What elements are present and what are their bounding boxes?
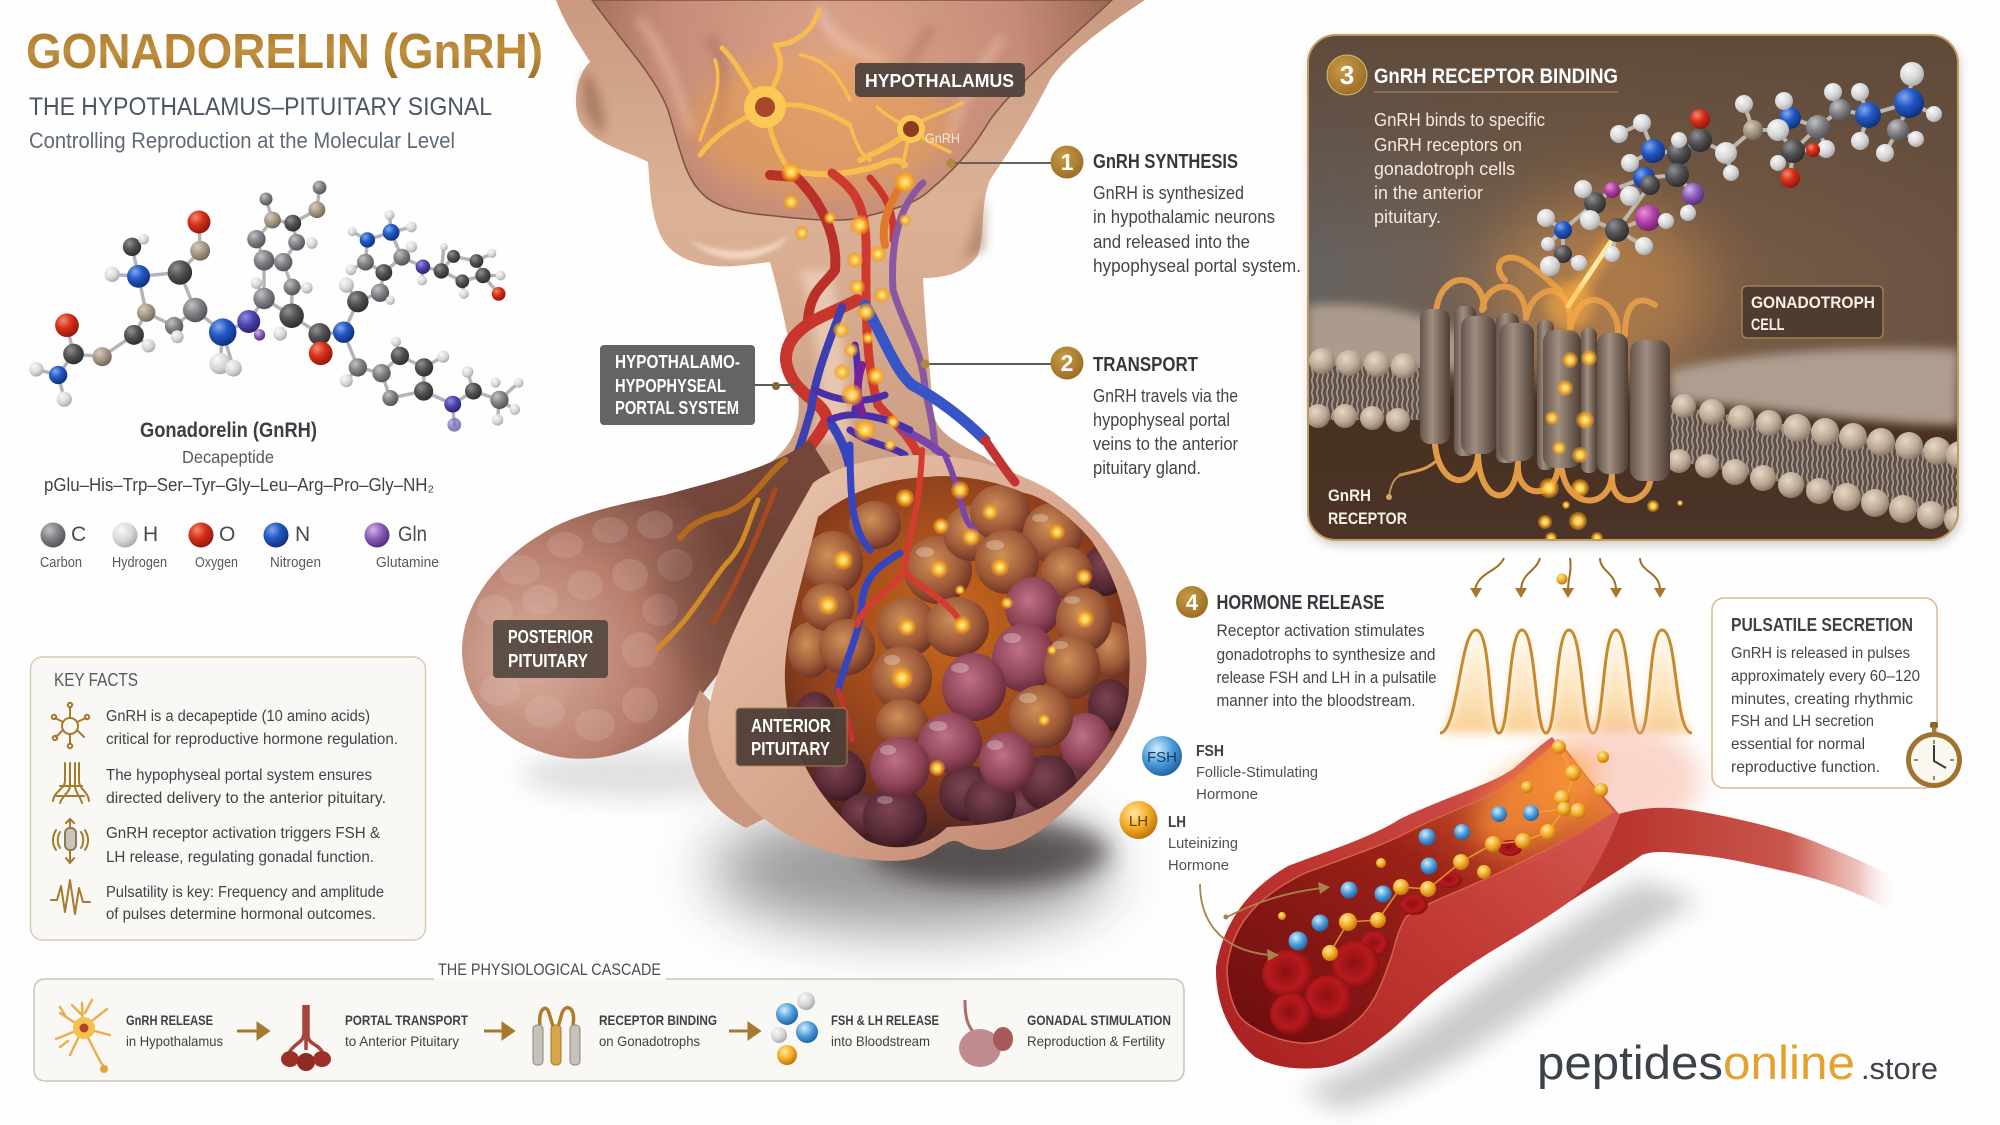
step 3 text: GnRH binds to specific [1374,110,1545,130]
signal beam [1546,240,1612,329]
logo [1537,1036,1938,1089]
arrow [729,1024,759,1038]
back wall of anterior lobe [688,690,800,828]
callout 2: transport: 2 [1061,350,1073,376]
step 3 text [1374,110,1545,227]
warm glow [1490,200,1710,380]
step text: portal transport [345,1012,468,1049]
cascade heading: THE PHYSIOLOGICAL CASCADE [438,960,661,979]
atom legend: Carbon [40,555,82,571]
outer vessel wall [1216,737,1620,1068]
step 3 heading: GnRH RECEPTOR BINDING [1374,65,1618,88]
molecule name: Gonadorelin (GnRH) [140,419,317,442]
label: gonadotroph cell: CELL [1751,315,1784,334]
posterior pituitary lobe [462,440,835,759]
step 3 number: 3 [1340,60,1354,90]
receptor helices [1420,306,1670,481]
hormone links [1330,747,1578,953]
label: GnRH receptor: RECEPTOR [1328,509,1407,528]
vessels on anterior lobe [838,440,1015,740]
fact 4: of pulses determine hormonal outcomes. [106,906,376,923]
step text: FSH and LH release: into Bloodstream [831,1033,930,1049]
atom legend: Oxygen [195,555,238,571]
step text: gonadal stimulation [1027,1012,1171,1049]
step 4: hormone release [1176,586,1436,710]
fact 4: Pulsatility is key: Frequency and amplitude [106,884,384,901]
panel: receptor binding [1306,35,1974,545]
callout 2: transport: GnRH travels via the [1093,386,1238,406]
label: portal system [600,345,796,425]
fact 2 [106,767,386,807]
glowing granules [818,481,1094,776]
panel: pulsatile secretion: PULSATILE SECRETION [1731,614,1913,635]
logo: peptides [1537,1036,1723,1089]
step 4: hormone release: HORMONE RELEASE [1216,592,1384,614]
step text: receptor binding [599,1012,717,1049]
panel: physiological cascade [34,960,1184,1081]
callout 1: synthesis: hypophyseal portal system. [1093,256,1301,276]
posterior lobe dark side [658,500,790,700]
title: GONADORELIN (GnRH) [26,25,543,79]
icon: molecule [52,703,89,748]
legend: FSH [1142,736,1318,803]
panel: pulsatile secretion: GnRH is released in pulses [1731,645,1910,662]
fact 2: directed delivery to the anterior pituitary. [106,790,386,807]
legend: LH: Luteinizing [1168,835,1238,852]
label: GnRH receptor [1328,472,1412,528]
step 4: hormone release: gonadotrophs to synthesize and [1216,646,1436,664]
legend: LH: LH [1129,813,1148,830]
legend: LH [1120,801,1238,874]
hormone granules in the stalk [781,162,916,451]
panel: key facts [30,657,426,940]
arrow [484,1024,513,1038]
callout 2: transport: veins to the anterior [1093,434,1238,454]
label: posterior pituitary [493,620,608,678]
fact 2: The hypophyseal portal system ensures [106,767,372,784]
step 3 text: gonadotroph cells [1374,159,1515,179]
atom legend: Glutamine [376,555,439,571]
legend: FSH: Hormone [1196,786,1258,803]
back wall glow [1540,725,1700,835]
callout 1: synthesis: 1 [1061,149,1074,175]
step 3 text: pituitary. [1374,207,1441,227]
fact 1 [106,708,398,748]
label: anterior pituitary: PITUITARY [751,739,830,759]
posterior lobe texture [477,511,693,741]
icon: hormone spheres [771,992,818,1065]
step 3 text: GnRH receptors on [1374,135,1522,155]
step 3 number [1327,55,1367,95]
step text: GnRH release: GnRH RELEASE [126,1012,213,1028]
tagline: Controlling Reproduction at the Molecular Level [29,128,455,153]
step text: FSH and LH release [831,1012,939,1049]
molecule: gonadorelin ball and stick [29,181,524,432]
tissue highlights [640,10,1000,135]
panel: pulsatile secretion: reproductive function. [1731,759,1880,776]
atom legend: H [143,523,158,546]
fact 3: GnRH receptor activation triggers FSH & [106,825,381,842]
panel: pulsatile secretion: minutes, creating rhythmic [1731,691,1913,708]
icon: pulse wave [51,880,90,914]
callout 1: synthesis: GnRH SYNTHESIS [1093,151,1238,173]
callout 2: transport [920,346,1238,478]
step text: portal transport: to Anterior Pituitary [345,1033,459,1049]
vessel shadow [1300,880,1700,1110]
release arrows [1475,558,1660,590]
cell highlights [877,514,1080,804]
atom legend: Hydrogen [112,555,167,571]
fact 1: GnRH is a decapeptide (10 amino acids) [106,708,370,725]
icon: receptor [533,1008,580,1065]
callout 1: synthesis: in hypothalamic neurons [1093,207,1275,227]
anterior pituitary capsule [708,455,1146,861]
step text: portal transport: PORTAL TRANSPORT [345,1012,468,1028]
atom legend: Nitrogen [270,555,321,571]
LH particles [1278,740,1609,961]
subtitle: THE HYPOTHALAMUS–PITUITARY SIGNAL [29,93,492,121]
panel: pulsatile secretion [1712,598,1937,788]
posterior lobe nerve vessels [658,460,785,648]
vessel lumen [1227,740,1614,1043]
icon: receptor [53,819,88,863]
label: posterior pituitary: POSTERIOR [508,627,593,647]
fact 3: LH release, regulating gonadal function. [106,849,374,866]
label: portal system: PORTAL SYSTEM [615,398,739,418]
tan stalk and fold [556,0,1145,520]
intracellular granules [1538,350,1683,544]
callout 2: transport: TRANSPORT [1093,354,1198,376]
illustration: blood vessel [1200,725,1910,1110]
fact 3 [106,825,381,866]
atom legend [40,522,439,571]
atom legend: N [295,523,310,546]
atom legend: Gln [398,523,427,546]
molecule class: Decapeptide [182,447,274,467]
legend: FSH: Follicle-Stimulating [1196,764,1318,781]
icon: portal vessels [53,763,89,803]
step text: GnRH release: in Hypothalamus [126,1033,223,1049]
step 4: hormone release: Receptor activation stimulates [1216,622,1424,640]
callout 1: synthesis: and released into the [1093,232,1250,252]
key facts heading: KEY FACTS [54,670,138,690]
receptor loops back [1400,258,1655,501]
label: GnRH receptor: GnRH [1328,486,1371,505]
label: posterior pituitary: PITUITARY [508,651,588,671]
amino acid sequence: pGlu–His–Trp–Ser–Tyr–Gly–Leu–Arg–Pro–Gly–NH₂ [44,475,434,495]
membrane tails [1308,365,1958,520]
logo: online [1723,1036,1855,1089]
portal vessels upper [750,173,985,530]
cast shadow [520,751,1110,930]
neuron glow [690,55,950,195]
illustration: hypothalamus and pituitary [462,0,1150,930]
fact 1: critical for reproductive hormone regulation. [106,731,398,748]
pulse glow [1440,630,1692,733]
callout 2: transport: hypophyseal portal [1093,410,1230,430]
FSH particles [1288,805,1539,950]
label: portal system: HYPOPHYSEAL [615,376,726,396]
panel: pulsatile secretion: essential for normal [1731,736,1865,753]
fact 4 [106,884,384,923]
panel: pulsatile secretion: approximately every 60–120 [1731,668,1920,685]
blurred back membrane [1308,304,1958,425]
legend: FSH: FSH [1196,743,1224,760]
label: portal system: HYPOTHALAMO- [615,352,740,372]
logo: .store [1861,1051,1938,1086]
callout 1: synthesis [946,146,1301,276]
step text: receptor binding: on Gonadotrophs [599,1033,700,1049]
bound ligand molecule [1537,62,1942,276]
label: GnRH on neuron: GnRH [925,130,960,146]
atom legend: C [71,523,86,546]
atom legend: O [219,523,235,546]
icon: neuron [56,1000,110,1073]
icon: portal vessel [281,1005,331,1071]
label: hypothalamus: HYPOTHALAMUS [865,71,1014,91]
step text: FSH and LH release: FSH & LH RELEASE [831,1012,939,1028]
label: hypothalamus [855,63,1025,97]
right vessel sleeve [1569,808,1910,915]
label: gonadotroph cell [1742,286,1883,338]
red blood cells [1262,840,1522,1035]
callout 2: transport: pituitary gland. [1093,458,1201,478]
callout 1: synthesis: GnRH is synthesized [1093,183,1244,203]
legend: LH: Hormone [1168,857,1229,874]
panel: pulsatile secretion: FSH and LH secretion [1731,713,1874,730]
pulse waveform [1440,558,1692,733]
icon: stopwatch [1906,722,1962,788]
step text: GnRH release [126,1012,223,1049]
step 4: hormone release: release FSH and LH in a pulsatile [1216,669,1436,687]
arrow heads [1470,588,1666,598]
neurons [700,10,962,174]
lumen glow [1457,730,1613,870]
step 3 text: in the anterior [1374,183,1483,203]
label: anterior pituitary [736,708,847,766]
step text: gonadal stimulation: GONADAL STIMULATION [1027,1012,1171,1028]
icon: gonad [959,1000,1013,1067]
step 4: hormone release: 4 [1186,590,1199,615]
step text: gonadal stimulation: Reproduction & Fertility [1027,1033,1165,1049]
label: anterior pituitary: ANTERIOR [751,716,831,736]
hypothalamus tissue [592,0,1112,220]
arrow [237,1024,268,1038]
step 4: hormone release: manner into the bloodstream. [1216,692,1416,710]
legend: LH: LH [1168,814,1186,831]
arrow heads [1224,882,1330,961]
step text: receptor binding: RECEPTOR BINDING [599,1012,717,1028]
stalk shading [582,70,985,440]
flow arrows [1200,884,1322,955]
anterior lobe cut surface with cells [784,476,1130,848]
label: gonadotroph cell: GONADOTROPH [1751,293,1875,312]
membrane lipid heads [1306,348,1974,534]
pulse trace [1440,630,1692,733]
legend: FSH: FSH [1147,749,1177,766]
